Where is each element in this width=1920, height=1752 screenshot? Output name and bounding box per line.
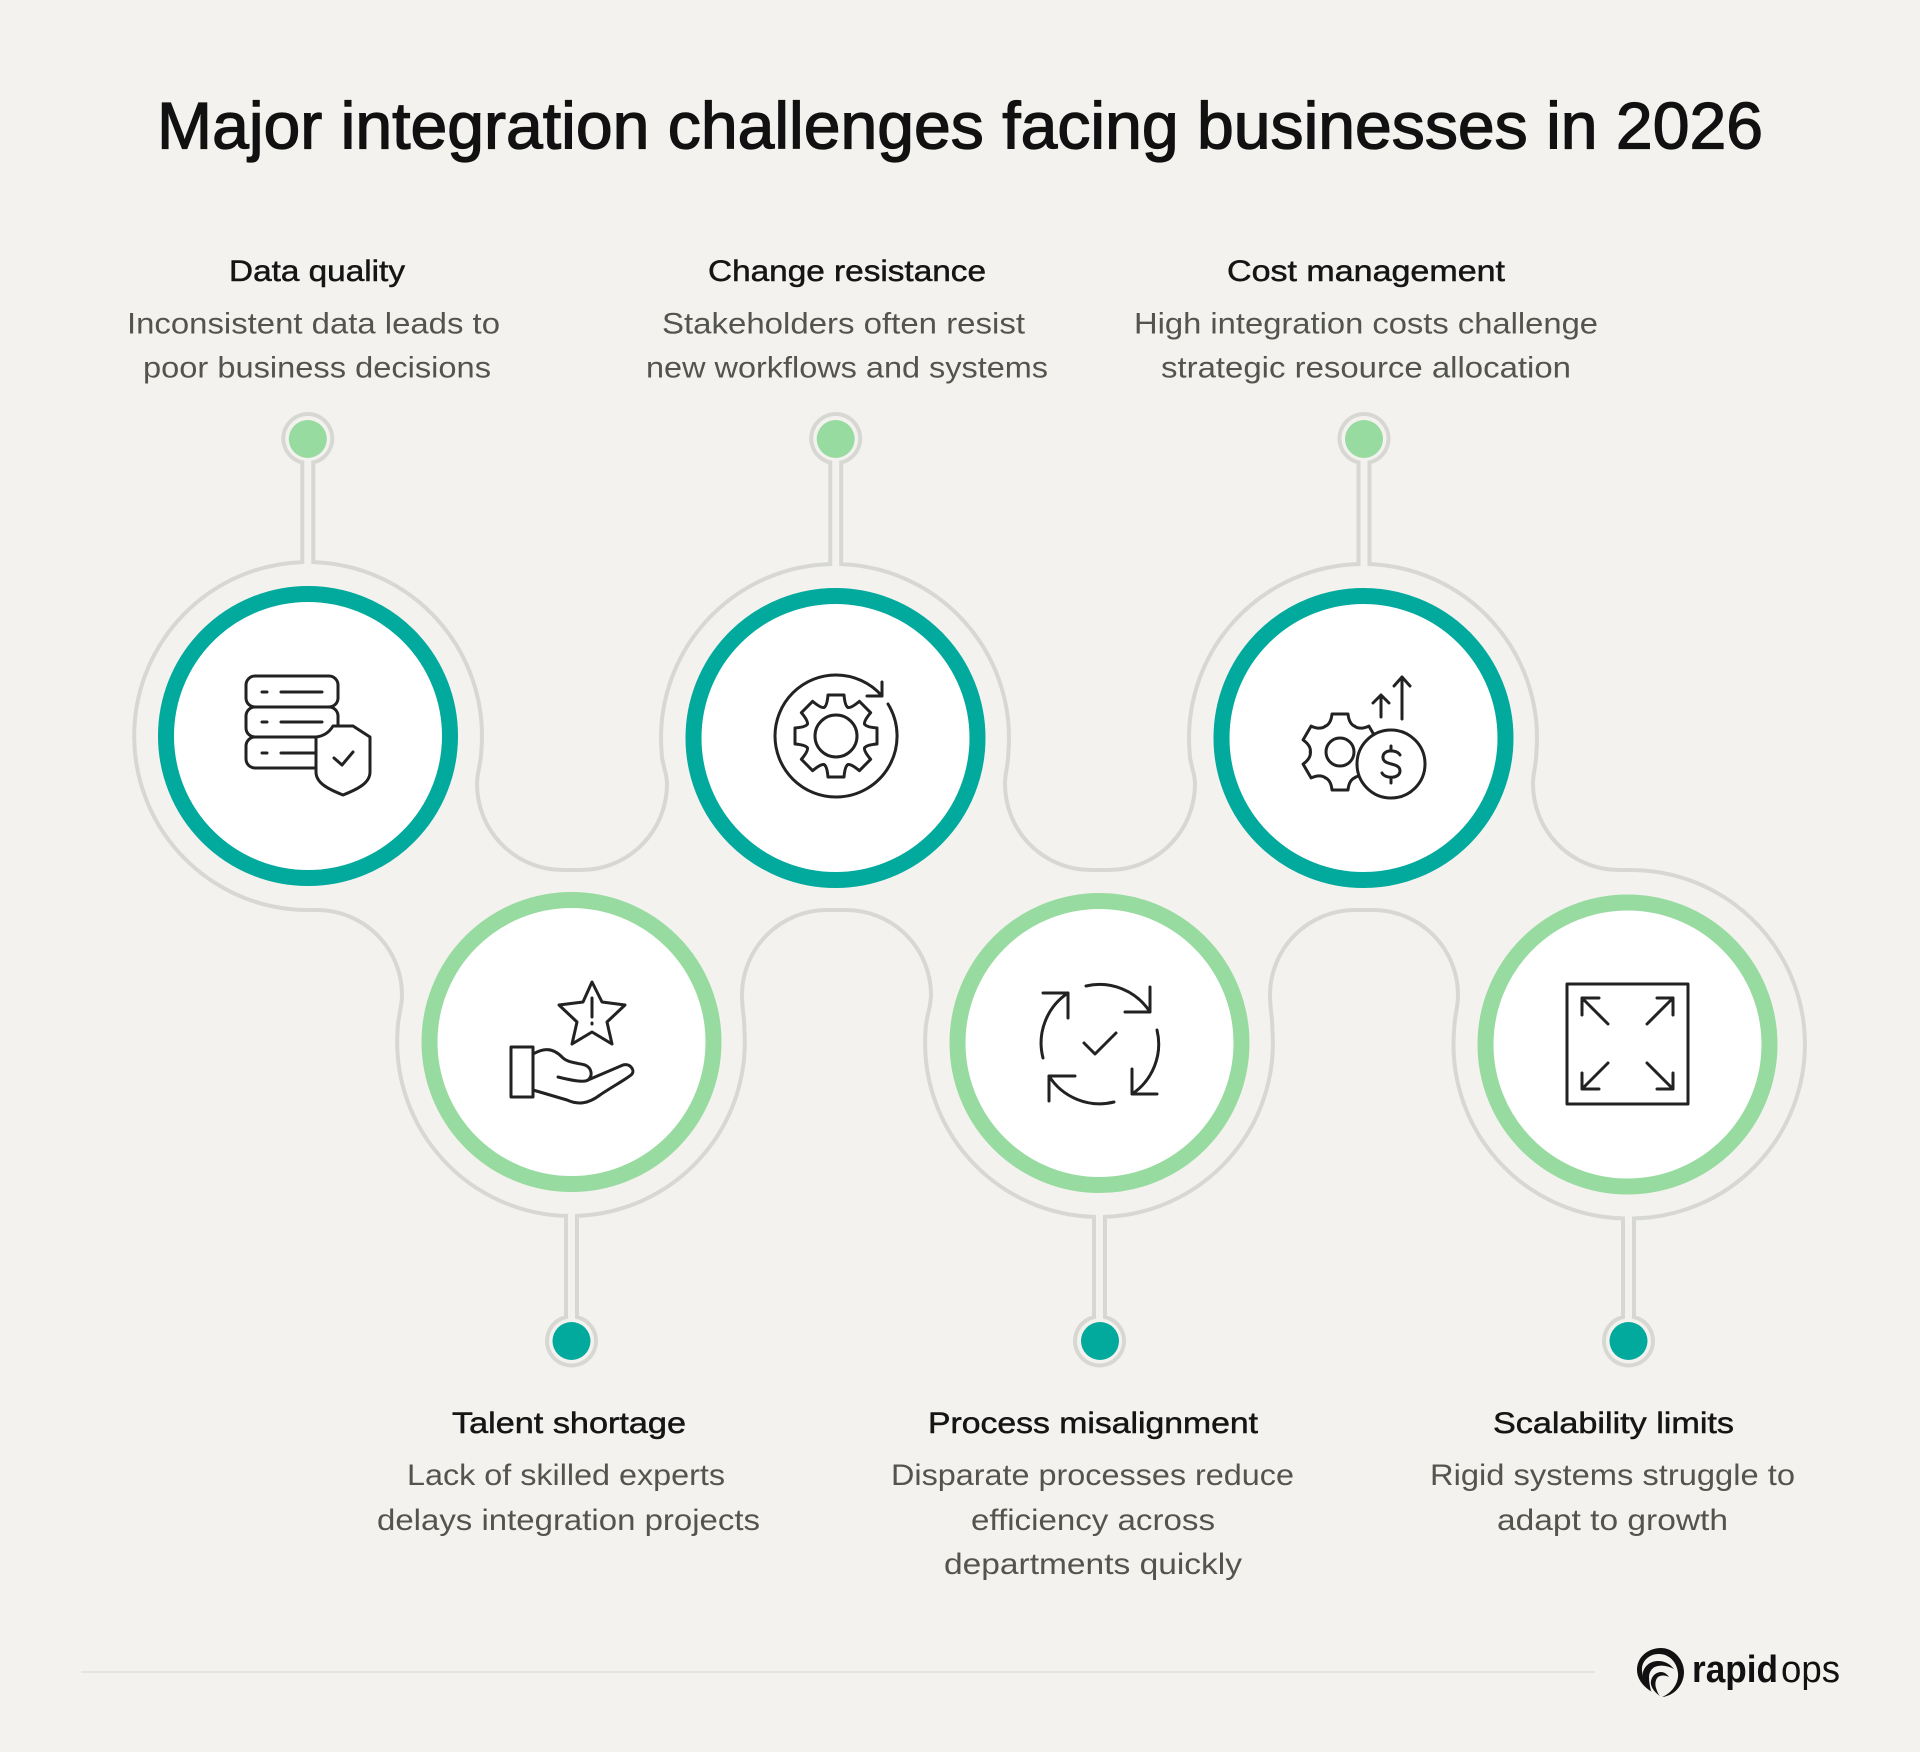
ring circle: change resistance	[694, 596, 978, 880]
panel: process misalignment	[891, 901, 1294, 1581]
text: scalability limits description: adapt to growth	[1497, 1504, 1728, 1537]
logo wordmark	[1692, 1649, 1840, 1691]
panel: scalability limits	[1430, 902, 1795, 1537]
panel: talent shortage	[377, 900, 760, 1537]
dot: change resistance	[817, 420, 855, 458]
logo wordmark: rapid	[1692, 1649, 1778, 1691]
title: Major integration challenges facing businesses in 2026	[157, 88, 1763, 162]
heading: talent shortage: Talent shortage	[452, 1407, 686, 1440]
text: cost management description: strategic resource allocation	[1161, 352, 1571, 384]
text: process misalignment description: departments quickly	[944, 1548, 1242, 1581]
logo mark	[1637, 1648, 1684, 1697]
icon: database with shield	[246, 676, 370, 795]
panel: cost management	[1134, 255, 1598, 880]
panel: data quality	[127, 255, 500, 878]
text: scalability limits description	[1430, 1459, 1795, 1537]
text: talent shortage description	[377, 1459, 760, 1537]
text: process misalignment description: efficiency across	[971, 1504, 1215, 1537]
text: change resistance description: new workflows and systems	[646, 352, 1048, 384]
heading: process misalignment: Process misalignment	[928, 1407, 1259, 1440]
ring circle: data quality	[166, 594, 450, 878]
text: talent shortage description: delays integration projects	[377, 1504, 760, 1537]
icon: cycle arrows with check	[1041, 984, 1159, 1104]
text: cost management description	[1134, 308, 1598, 384]
heading: change resistance: Change resistance	[708, 255, 986, 288]
ring circle: talent shortage	[430, 900, 714, 1184]
ring circle: process misalignment	[958, 901, 1242, 1185]
text: data quality description: Inconsistent data leads to	[127, 308, 500, 340]
icon: hand holding star	[511, 982, 633, 1103]
text: change resistance description: Stakeholders often resist	[662, 308, 1026, 340]
dot: process misalignment	[1081, 1322, 1119, 1360]
dot: talent shortage	[552, 1322, 590, 1360]
logo wordmark: ops	[1781, 1649, 1840, 1691]
dot: cost management	[1345, 420, 1383, 458]
text: data quality description: poor business decisions	[143, 352, 491, 384]
text: process misalignment description	[891, 1459, 1294, 1581]
text: process misalignment description: Disparate processes reduce	[891, 1459, 1294, 1492]
panel: change resistance	[646, 255, 1048, 880]
text: talent shortage description: Lack of skilled experts	[407, 1459, 725, 1492]
ring circle: cost management	[1222, 596, 1506, 880]
icon: gear, coin and up arrows	[1300, 677, 1425, 798]
text: change resistance description	[646, 308, 1048, 384]
dot: scalability limits	[1610, 1322, 1648, 1360]
heading: scalability limits: Scalability limits	[1493, 1407, 1734, 1440]
icon: expand arrows in square	[1567, 984, 1688, 1104]
heading: cost management: Cost management	[1227, 255, 1506, 288]
icon: gear with rotation arrow	[775, 675, 897, 797]
heading: data quality: Data quality	[229, 255, 405, 288]
logo: rapidops	[1637, 1648, 1840, 1697]
text: cost management description: High integration costs challenge	[1134, 308, 1598, 340]
text: scalability limits description: Rigid systems struggle to	[1430, 1459, 1795, 1492]
dot: data quality	[289, 420, 327, 458]
ring circle: scalability limits	[1486, 902, 1770, 1186]
connector outline with stems and rings	[134, 414, 1805, 1365]
text: data quality description	[127, 308, 500, 384]
